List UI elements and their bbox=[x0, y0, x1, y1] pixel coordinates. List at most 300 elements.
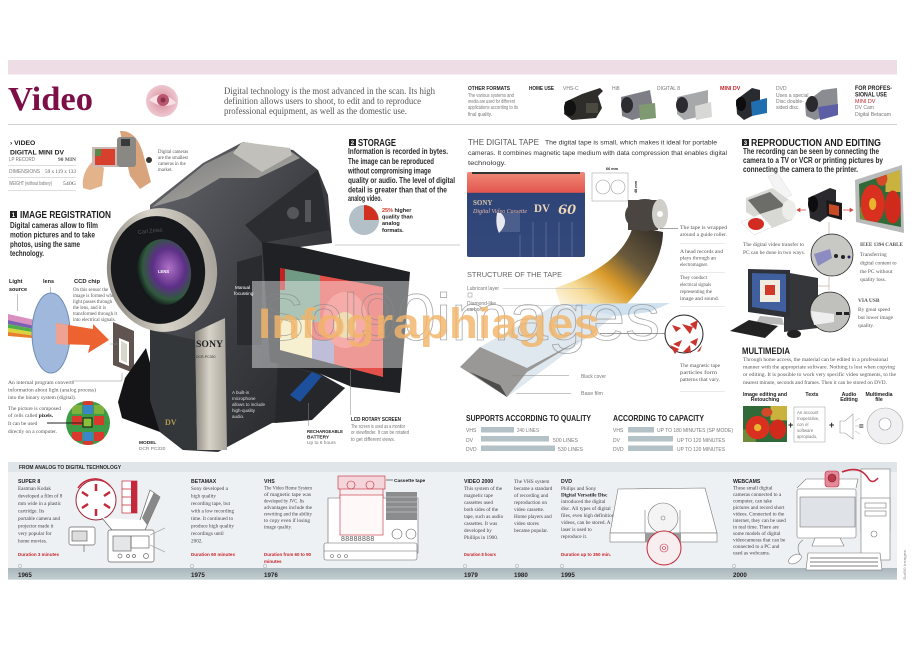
microphone caption: microphone bbox=[232, 396, 256, 401]
illustration: main camcorder bbox=[99, 142, 410, 452]
text: betamax: produce high quality bbox=[191, 524, 234, 530]
panel: other formats bbox=[468, 86, 892, 120]
panel: other formats: Disc double- bbox=[776, 99, 804, 105]
panel: other formats: Uses a special bbox=[776, 93, 809, 99]
illustration: printer bbox=[741, 174, 796, 235]
text: super 8: portable camera and bbox=[18, 516, 60, 522]
diagram: light source, lens and CCD chip: into the binary system (digital). bbox=[8, 394, 76, 401]
diagram: light source, lens and CCD chip: into electrical signals. bbox=[73, 318, 116, 323]
timeline panel: 1976 bbox=[264, 572, 278, 579]
panel: other formats: DVD bbox=[776, 86, 787, 92]
text: vhs update 1980: video cassette. bbox=[514, 507, 544, 513]
panel: multimedia: Multimedia bbox=[865, 392, 893, 398]
panel: image registration: photos, using the same bbox=[10, 240, 81, 249]
text: webcams: internet, they can be used bbox=[733, 518, 786, 524]
text: webcams: videos. Connected to the bbox=[733, 512, 785, 518]
microphone caption: audio. bbox=[232, 414, 244, 419]
label: rechargeable battery: Up to 6 hours bbox=[307, 440, 336, 446]
callouts: tape notes: particles form bbox=[680, 369, 718, 376]
structure of the tape labels: Lubricant layer bbox=[467, 286, 499, 292]
panel: reproduction and editing bbox=[742, 137, 884, 174]
panel: multimedia: Texts bbox=[805, 392, 819, 398]
chart: according to capacity bbox=[613, 414, 733, 453]
chart: according to capacity: DVD bbox=[613, 447, 624, 453]
label: lcd rotary screen bbox=[350, 370, 409, 443]
panel: video spec: › VIDEO bbox=[10, 140, 35, 147]
icon: eye bbox=[146, 85, 178, 117]
text: vhs: VHS bbox=[264, 479, 275, 485]
panel: storage: analog video. bbox=[348, 194, 382, 203]
text: image credit: Sol90 Images bbox=[903, 550, 907, 580]
illustration: television with flower bbox=[855, 165, 904, 233]
chart: supports according to quality: 240 LINES bbox=[517, 428, 540, 434]
text: vhs update 1980: became a standard bbox=[514, 486, 553, 492]
lens ring bbox=[99, 201, 225, 339]
panel: other formats: applications according to its bbox=[468, 105, 518, 111]
carl zeiss text: Carl Zeiss bbox=[138, 227, 163, 236]
timeline panel: 1965 bbox=[18, 572, 32, 579]
text: vhs: minutes bbox=[264, 559, 282, 564]
intro text bbox=[224, 86, 435, 116]
text: betamax: recordings until bbox=[191, 531, 224, 537]
panel: storage: quality than bbox=[382, 214, 414, 220]
label: lcd rotary screen: LCD ROTARY SCREEN bbox=[351, 417, 401, 423]
heading: the digital tape bbox=[468, 138, 728, 167]
text: video 2000: tape, such as audio bbox=[464, 514, 504, 520]
text: video 2000: cassettes. It was bbox=[464, 521, 497, 527]
model plate: DCR-PC330 bbox=[196, 355, 216, 359]
text: dvd: Duration up to 350 min. bbox=[561, 552, 611, 557]
panel: multimedia: Audio bbox=[842, 392, 856, 398]
text: super 8: cartridge. Its bbox=[18, 508, 44, 514]
callouts: tape notes: electrical signals bbox=[680, 282, 711, 288]
text: webcams: some models of digital bbox=[733, 530, 781, 537]
diagram: light source, lens and CCD chip: information about light (analog process) bbox=[8, 386, 96, 394]
text: vhs update 1980: video stores bbox=[514, 521, 539, 527]
manual focusing label second line: focussing bbox=[234, 291, 254, 296]
camcorder top housing bbox=[152, 148, 300, 207]
heading: the digital tape: technology. bbox=[468, 160, 506, 167]
label: rechargeable battery bbox=[307, 403, 344, 446]
label: model: MODEL bbox=[139, 440, 156, 446]
cable connection callouts: quality loss. bbox=[860, 277, 886, 283]
illustration: computer bbox=[730, 269, 829, 338]
timeline panel bbox=[8, 462, 897, 580]
timeline panel: 1975 bbox=[191, 572, 205, 579]
panel: multimedia: Through home access, the material can be edited in a professional bbox=[743, 356, 888, 363]
left dark lower body bbox=[150, 330, 197, 450]
caption: small cameras: Digital cameras bbox=[158, 150, 188, 155]
text: dvd: reproduce it. bbox=[561, 534, 587, 540]
timeline panel: 1980 bbox=[514, 572, 528, 579]
illustration: dv cassette: DV bbox=[534, 201, 550, 215]
diagram: light source, lens and CCD chip: An internal program converts bbox=[8, 380, 74, 386]
text: dvd: Digital Versatile Disc bbox=[561, 492, 608, 498]
panel: video spec: 59 x 119 x 133 bbox=[45, 169, 76, 175]
heading: the digital tape: The digital tape is small, which makes it ideal for portable bbox=[545, 140, 717, 146]
diagram: light source, lens and CCD chip bbox=[8, 279, 134, 435]
text: video 2000: both sides of the bbox=[464, 506, 499, 513]
text: super 8: mm wide in a plastic bbox=[18, 501, 62, 507]
text: betamax bbox=[191, 479, 235, 557]
caption: small cameras: are the smallest bbox=[158, 156, 189, 161]
panel: image registration: Digital cameras allow to film bbox=[10, 221, 98, 230]
text: dvd bbox=[561, 479, 615, 557]
illustration: dv cassette: SONY bbox=[473, 199, 492, 207]
panel: storage: The image can be reproduced bbox=[348, 157, 434, 166]
text: vhs bbox=[264, 479, 313, 564]
text: vhs: developed by JVC. Its bbox=[264, 498, 304, 504]
panel: video spec: DIGITAL MINI DV bbox=[10, 150, 64, 156]
panel: storage: Information is recorded in bytes. bbox=[348, 147, 448, 156]
panel: reproduction and editing: 3 bbox=[744, 141, 748, 147]
tape dimensions diagram bbox=[592, 167, 638, 201]
tape dimensions diagram: 48 mm bbox=[634, 180, 638, 193]
diagram: light source, lens and CCD chip: the lens, and it is bbox=[73, 306, 106, 311]
watermark outlined text: Sol90images bbox=[258, 280, 660, 354]
text: webcams: connected to a PC and bbox=[733, 544, 780, 550]
cable connection callouts: IEEE 1394 CABLE bbox=[860, 242, 903, 248]
panel: storage: 25% higher bbox=[382, 208, 412, 214]
text: webcams: in real time. There are bbox=[733, 524, 780, 530]
chart: according to capacity: DV bbox=[613, 438, 621, 444]
panel: image registration bbox=[10, 209, 111, 258]
panel: storage: without compromising image bbox=[347, 166, 432, 176]
chart: according to capacity: UP TO 180 MINUTES (SP MODE) bbox=[657, 428, 733, 434]
text: super 8: SUPER 8 bbox=[18, 479, 40, 485]
illustration: dv cassette bbox=[467, 172, 585, 257]
diagram: light source, lens and CCD chip: It can be used bbox=[8, 421, 38, 427]
illustration: dv cassette: 60 bbox=[558, 202, 577, 218]
watermark orange text: Infographiages bbox=[258, 300, 600, 348]
text: super 8: very popular for bbox=[18, 530, 52, 537]
text: super 8: Eastman Kodak bbox=[18, 486, 51, 492]
cable connection callouts: VIA USB bbox=[858, 298, 880, 304]
chart: supports according to quality: DVD bbox=[466, 447, 477, 453]
text: betamax: 2002. bbox=[191, 538, 203, 544]
text: video 2000: magnetic tape bbox=[464, 493, 494, 499]
text: vhs update 1980: became popular. bbox=[514, 528, 548, 534]
text: super 8: projector made it bbox=[18, 524, 54, 530]
text: webcams: WEBCAMS bbox=[733, 479, 761, 485]
text: dvd: disc. All types of digital bbox=[561, 505, 611, 512]
timeline panel: 2000 bbox=[733, 572, 747, 579]
text: vhs: to copy even if losing bbox=[264, 517, 310, 524]
sony logo: SONY bbox=[196, 339, 224, 349]
multimedia equation icons: Inoperative, bbox=[797, 416, 819, 421]
panel: reproduction and editing: connecting the camera to the printer. bbox=[743, 165, 858, 174]
multimedia equation icons: con el bbox=[797, 422, 809, 427]
panel: multimedia: MULTIMEDIA bbox=[742, 346, 790, 357]
illustration: vhs recorder with cassette: Cassette tape bbox=[394, 478, 426, 484]
structure of the tape labels: Base film bbox=[581, 391, 603, 397]
structure of the tape labels: Black cover bbox=[581, 374, 606, 380]
intro text: Digital technology is the most advanced in the scan. Its high bbox=[224, 86, 435, 96]
panel: other formats: media are used for different bbox=[468, 99, 515, 105]
callouts: tape notes bbox=[660, 225, 727, 391]
text: vhs update 1980: of recording and bbox=[514, 492, 549, 499]
panel: storage bbox=[347, 137, 455, 235]
caption: small cameras: market. bbox=[158, 168, 173, 173]
illustration: vhs recorder with cassette: 88888888 bbox=[341, 536, 375, 543]
text: vhs update 1980: reproduction on bbox=[514, 500, 547, 506]
label: model: DCR PC330 bbox=[139, 446, 166, 452]
text: video 2000: This system of the bbox=[464, 485, 503, 492]
cable connection callouts bbox=[743, 241, 903, 329]
heading: the digital tape: cameras. It combines magnetic tape medium with data compression that enables digital bbox=[468, 150, 728, 157]
cable connection callouts: the PC without bbox=[860, 269, 893, 275]
panel: storage: quality or audio. The level of digital bbox=[348, 176, 455, 185]
top pink band bbox=[8, 60, 897, 74]
chart: supports according to quality: 500 LINES bbox=[553, 438, 579, 444]
label: rechargeable battery: RECHARGEABLE bbox=[307, 429, 344, 435]
panel: other formats: OTHER FORMATS bbox=[468, 86, 510, 92]
text: webcams bbox=[733, 479, 786, 556]
heading: the digital tape: THE DIGITAL TAPE bbox=[468, 138, 539, 147]
text: video 2000: Duration 8 hours bbox=[464, 552, 496, 557]
text: webcams: videocameras that can be bbox=[733, 538, 786, 544]
structure of the tape labels: Diamond-like bbox=[467, 301, 496, 307]
diagram: light source, lens and CCD chip: CCD chip bbox=[74, 279, 101, 285]
chart: according to capacity: UP TO 120 MINUTES bbox=[677, 438, 726, 444]
illustration: vhs recorder with cassette bbox=[324, 476, 426, 560]
panel: video spec: WEIGHT (without battery) bbox=[9, 181, 52, 187]
panel: other formats: final quality. bbox=[468, 112, 492, 118]
text: betamax: time. It continued to bbox=[191, 516, 233, 522]
panel: other formats: DV Cam bbox=[855, 105, 874, 111]
cable connection callouts: but lower image bbox=[858, 315, 894, 321]
panel: image registration: 1 bbox=[12, 213, 16, 219]
panel: other formats: DIGITAL 8 bbox=[657, 86, 680, 92]
text: vhs: The Video Home System bbox=[264, 486, 312, 492]
text: betamax: Duration 60 minutes bbox=[191, 552, 235, 557]
diagram: light source, lens and CCD chip: On this sensor the bbox=[73, 288, 108, 293]
illustration: webcam computer bbox=[787, 469, 890, 570]
diagram: light source, lens and CCD chip: light passes through bbox=[73, 300, 113, 305]
panel: other formats: MINI DV bbox=[720, 86, 741, 92]
camcorder grip bbox=[118, 348, 160, 432]
structure of the tape labels: STRUCTURE OF THE TAPE bbox=[467, 270, 562, 279]
callouts: tape notes: The magnetic tape bbox=[680, 363, 721, 369]
timeline panel: FROM ANALOG TO DIGITAL TECHNOLOGY bbox=[19, 465, 121, 471]
callouts: tape notes: representing the bbox=[680, 289, 713, 295]
panel: reproduction and editing: camera to a TV or VCR or printing pictures by bbox=[743, 156, 884, 165]
tape dimensions diagram: 66 mm bbox=[606, 167, 619, 171]
chart: supports according to quality: DV bbox=[466, 438, 474, 444]
diagram: light source, lens and CCD chip: Light bbox=[9, 279, 23, 285]
text: video 2000: developed by bbox=[464, 528, 492, 534]
panel: video spec: 90 MIN bbox=[58, 157, 76, 163]
panel: storage: STORAGE bbox=[358, 137, 396, 149]
panel: multimedia: Editing bbox=[840, 397, 858, 403]
hot shoe bbox=[233, 142, 292, 172]
panel: reproduction and editing: The recording can be seen by connecting the bbox=[743, 147, 880, 156]
text: betamax: recording tape, but bbox=[191, 501, 231, 507]
text: vhs: rewriting and the ability bbox=[264, 512, 312, 518]
illustration: dv cassette: Digital Video Cassette bbox=[472, 209, 527, 215]
text: dvd: videos, can be stored. A bbox=[561, 520, 611, 526]
structure of the tape labels: carbon bbox=[467, 307, 483, 313]
lens glass bbox=[133, 236, 195, 308]
multimedia equation icons: = bbox=[859, 422, 864, 431]
microphone caption: high-quality bbox=[232, 408, 256, 413]
chart: supports according to quality: VHS bbox=[466, 428, 477, 434]
panel: multimedia: manner with the appropriate software. Nothing is lost when copying bbox=[743, 364, 895, 370]
illustration: super 8 projector bbox=[69, 479, 165, 562]
text: dvd: DVD bbox=[561, 479, 572, 485]
text: webcams: computer, can take bbox=[733, 498, 773, 504]
chart: supports according to quality: SUPPORTS ACCORDING TO QUALITY bbox=[466, 414, 592, 423]
multimedia equation icons: apropiado, bbox=[797, 434, 817, 439]
text: vhs: Duration from 60 to 90 bbox=[264, 552, 311, 557]
battery compartment bbox=[275, 360, 345, 423]
label: model bbox=[139, 440, 166, 452]
callouts: tape notes: electromagnet. bbox=[680, 262, 708, 268]
label: lcd rotary screen: The screen is used as a monitor bbox=[351, 424, 405, 430]
manual focusing label: Manual bbox=[235, 285, 250, 290]
cable connection callouts: By great speed bbox=[858, 307, 890, 313]
panel: reproduction and editing: REPRODUCTION AND EDITING bbox=[751, 137, 881, 149]
chart: according to capacity: VHS bbox=[613, 428, 624, 434]
connector line storage to lcd bbox=[335, 244, 460, 246]
panel: storage: detail is greater than that of the bbox=[348, 186, 448, 194]
panel: image registration: technology. bbox=[10, 249, 44, 258]
multimedia equation icons: + bbox=[829, 420, 834, 430]
panel: other formats: VHS-C bbox=[563, 86, 579, 92]
text: betamax: Sony developed a bbox=[191, 486, 229, 492]
panel: multimedia: Retouching bbox=[751, 397, 779, 403]
caption: small cameras: cameras in the bbox=[158, 162, 186, 167]
intro text: professional equipment, as well as the domestic use. bbox=[224, 106, 407, 116]
dv badge: DV bbox=[165, 418, 177, 427]
panel: other formats: HOME USE bbox=[529, 86, 554, 92]
chart: supports according to quality bbox=[466, 414, 592, 453]
illustration: dvd player and disc bbox=[610, 488, 717, 565]
watermark box bbox=[252, 281, 410, 368]
panel: video spec bbox=[8, 140, 76, 190]
panel: storage: 2 bbox=[351, 141, 355, 147]
callouts: tape notes: They conduct bbox=[680, 275, 707, 281]
panel: multimedia: or editing. It is possible to work very specific video segments, to the bbox=[743, 371, 897, 378]
callouts: tape notes: plays through an bbox=[680, 256, 716, 262]
speaker and switch bbox=[287, 200, 311, 222]
callouts: tape notes: A head records and bbox=[680, 249, 723, 255]
text: super 8: developed a film of 8 bbox=[18, 492, 63, 500]
text: webcams: pictures and record short bbox=[733, 505, 785, 511]
side panel detail bbox=[245, 170, 330, 243]
text: dvd: files, even high definition bbox=[561, 512, 615, 519]
multimedia equation icons: software bbox=[797, 428, 814, 433]
lcd screen bbox=[280, 268, 383, 377]
silver strip bbox=[195, 318, 227, 450]
multimedia equation icons: An account bbox=[797, 410, 819, 415]
header rule bbox=[8, 123, 897, 126]
text: dvd: Philips and Sony bbox=[561, 486, 597, 492]
diagram: light source, lens and CCD chip: The picture is composed bbox=[8, 406, 61, 412]
multimedia equation icons bbox=[743, 406, 903, 444]
text: webcams: These small digital bbox=[733, 486, 773, 492]
cable connection callouts: PC can be done in two ways. bbox=[743, 250, 805, 256]
lens label: LENS bbox=[158, 269, 169, 274]
panel: storage: formats. bbox=[382, 228, 404, 234]
lcd panel bezel bbox=[262, 242, 410, 393]
timeline panel: 1995 bbox=[561, 572, 575, 579]
panel: multimedia: Image editing and bbox=[743, 392, 787, 398]
panel: other formats: Hi8 bbox=[612, 86, 620, 92]
camcorder body bbox=[150, 142, 345, 452]
text: betamax: high quality bbox=[191, 494, 216, 500]
panel: multimedia bbox=[742, 346, 897, 403]
diagram: light source, lens and CCD chip: image is formed when bbox=[73, 294, 117, 299]
panel: other formats: The various systems and bbox=[468, 93, 514, 99]
text: betamax: with a low recording bbox=[191, 508, 234, 514]
structure of the tape labels bbox=[467, 270, 606, 397]
text: video 2000: VIDEO 2000 bbox=[464, 479, 493, 485]
label: rechargeable battery: BATTERY bbox=[307, 434, 330, 440]
icon: pixel grid circle bbox=[47, 401, 110, 445]
cable connection callouts: quality. bbox=[858, 323, 874, 329]
caption: small cameras bbox=[158, 150, 189, 173]
illustration: hands holding small camera bbox=[83, 131, 152, 190]
panel: storage: analog bbox=[382, 221, 400, 227]
panel: other formats: Digital Betacam bbox=[855, 112, 891, 118]
chart: according to capacity: UP TO 120 MINUTES bbox=[677, 447, 726, 453]
panel: video spec: DIMENSIONS bbox=[9, 169, 41, 175]
illustration: tape ribbon and roller bbox=[460, 199, 670, 397]
text: webcams: used as webcams. bbox=[733, 550, 770, 556]
multimedia equation icons: + bbox=[788, 420, 793, 430]
panel: other formats: SIONAL USE bbox=[855, 92, 887, 98]
panel: other formats: sided disc. bbox=[776, 105, 800, 111]
panel: other formats: MINI DV bbox=[855, 99, 876, 105]
text: betamax: BETAMAX bbox=[191, 479, 217, 485]
text: vhs update 1980 bbox=[514, 479, 553, 534]
panel: image registration: motion pictures and to take bbox=[10, 230, 96, 240]
chart: according to capacity: ACCORDING TO CAPACITY bbox=[613, 414, 705, 423]
diagram: light source, lens and CCD chip: directly on a computer. bbox=[8, 429, 57, 435]
panel: image registration: IMAGE REGISTRATION bbox=[20, 209, 111, 221]
title: Video bbox=[8, 81, 93, 118]
panel: video spec: 540G bbox=[63, 181, 76, 187]
label: lcd rotary screen: or viewfinder. It can be rotated bbox=[351, 430, 409, 436]
panel: multimedia: file bbox=[875, 397, 883, 403]
timeline panel: 1979 bbox=[464, 572, 478, 579]
microphone caption: allows to include bbox=[232, 402, 266, 407]
cable connection callouts: The digital video transfer to bbox=[743, 241, 804, 248]
arrows and camera bbox=[797, 188, 853, 290]
text: vhs: image quality. bbox=[264, 524, 292, 530]
text: super 8: home movies. bbox=[18, 538, 47, 544]
callouts: tape notes: around a guide roller. bbox=[680, 232, 727, 238]
label: lcd rotary screen: to get different views. bbox=[351, 437, 395, 443]
text: super 8: Duration 3 minutes bbox=[18, 552, 59, 557]
text: webcams: cameras connected to a bbox=[733, 492, 782, 498]
text: vhs update 1980: Home players and bbox=[514, 514, 552, 520]
chart: supports according to quality: 530 LINES bbox=[558, 447, 584, 453]
callouts: tape notes: image and sound. bbox=[680, 296, 719, 302]
diagram: light source, lens and CCD chip: transformed through it bbox=[73, 312, 118, 317]
text: super 8 bbox=[18, 479, 63, 557]
text: video 2000: Phillips in 1900. bbox=[464, 535, 498, 541]
text: dvd: laser is used to bbox=[561, 527, 592, 533]
text: video 2000 bbox=[464, 479, 504, 557]
lower side grip dark bbox=[237, 255, 262, 345]
panel: video spec: LP RECORD bbox=[9, 157, 35, 163]
text: vhs: advantages include the bbox=[264, 505, 313, 511]
cable connection callouts: Transferring bbox=[860, 251, 887, 258]
panel: other formats: FOR PROFES- bbox=[855, 86, 892, 92]
icon: usb port circle bbox=[810, 292, 850, 332]
